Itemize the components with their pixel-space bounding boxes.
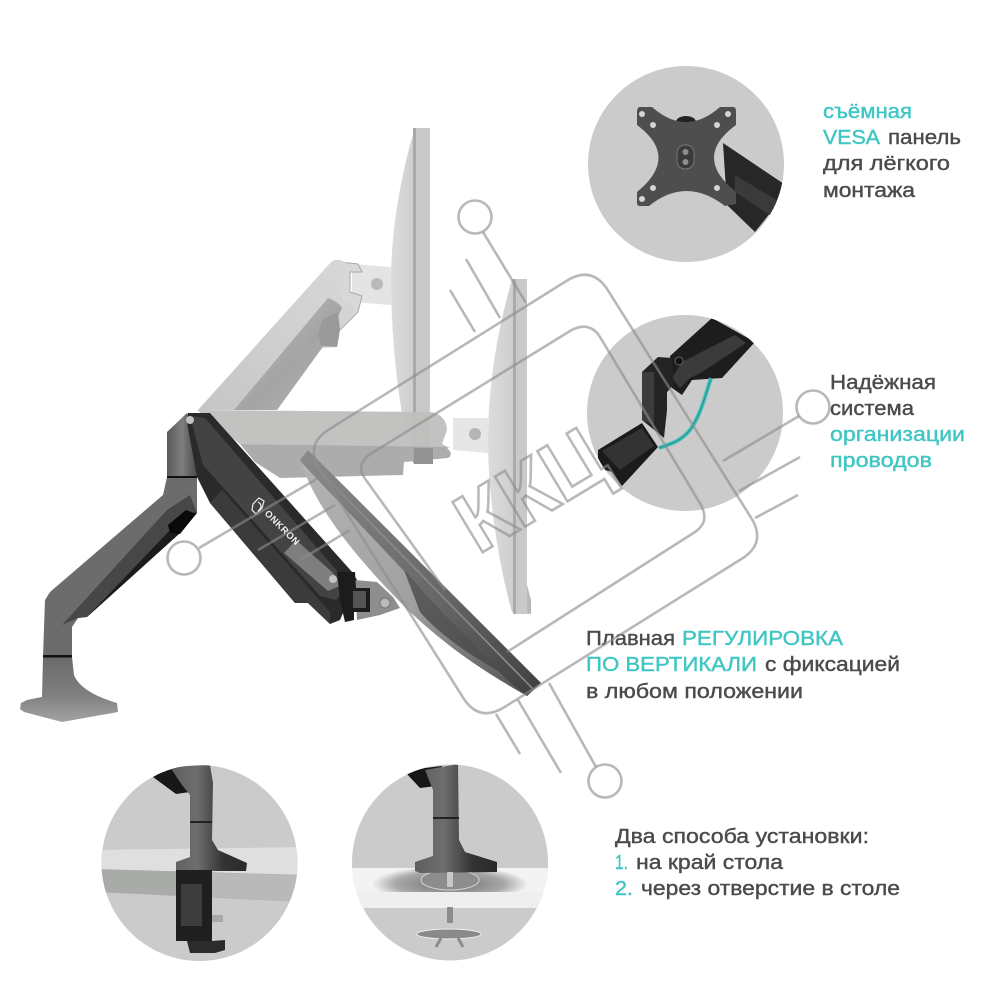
upper arm <box>187 413 357 624</box>
teal cable <box>659 378 711 448</box>
text: VESA caption: монтажа <box>823 180 916 202</box>
collar ring <box>433 817 459 819</box>
arm shoulder <box>153 767 188 794</box>
text: cable caption: организации <box>830 424 965 446</box>
text: VESA caption: панель <box>888 127 961 149</box>
bracket bolt middle <box>469 428 481 440</box>
text: installation caption: на край стола <box>636 852 784 874</box>
watermark text: ККЦ <box>439 408 623 571</box>
lower bolt <box>447 907 453 923</box>
text: cable caption: проводов <box>830 450 932 472</box>
silver arm upper position <box>198 128 430 463</box>
text: adjustment caption <box>586 628 900 703</box>
table hole <box>421 870 479 890</box>
pivot joint <box>675 357 683 365</box>
VESA plate <box>637 107 736 206</box>
upper bolt <box>447 872 453 887</box>
bolt on head <box>380 598 390 608</box>
dark tilted monitor <box>300 450 541 696</box>
text: adjustment caption: в любом положении <box>586 681 803 703</box>
bracket: middle position <box>453 418 488 453</box>
bracket bolt upper <box>371 278 383 290</box>
washer plate <box>417 929 481 939</box>
desk clamp base <box>20 657 118 722</box>
watermark outer frame <box>314 275 757 713</box>
bracket: upper position <box>352 264 391 305</box>
table front edge <box>350 892 550 908</box>
text: VESA caption <box>823 101 961 202</box>
text: adjustment caption: с фиксацией <box>765 654 900 676</box>
desk edge <box>95 869 305 902</box>
text: adjustment caption: Плавная <box>586 628 675 650</box>
vertical column <box>642 357 674 438</box>
upper arm face <box>190 416 345 600</box>
connector: top <box>450 200 526 332</box>
column <box>170 765 247 871</box>
watermark lines <box>168 200 830 798</box>
desk top surface <box>95 847 305 875</box>
text: cable caption: система <box>830 398 915 420</box>
hinge upper <box>340 262 362 330</box>
text: adjustment caption: РЕГУЛИРОВКА <box>682 628 844 650</box>
text: installation caption: через отверстие в столе <box>641 878 900 900</box>
connector: bottom <box>496 683 622 798</box>
connector: left <box>168 477 350 574</box>
column <box>415 764 497 873</box>
arm behind plate <box>723 143 782 232</box>
panel: clamp mount circle <box>95 765 305 961</box>
connector: right <box>723 390 830 518</box>
monitor bezel <box>300 450 541 696</box>
arm: middle position lower face <box>240 444 451 478</box>
black joint <box>337 572 370 622</box>
upper arm section <box>670 318 755 395</box>
gas spring highlight <box>284 540 342 591</box>
brand name: ONKRON <box>262 508 302 548</box>
text: adjustment caption: ПО ВЕРТИКАЛИ <box>586 654 757 676</box>
tilt head <box>355 580 400 620</box>
rivet top <box>186 416 194 424</box>
silver arm middle position <box>197 279 531 614</box>
text: VESA caption: для лёгкого <box>823 153 950 175</box>
text: cable caption: Надёжная <box>830 372 936 394</box>
arm: upper position <box>198 260 354 410</box>
wing nuts <box>436 938 463 947</box>
text: VESA caption: съёмная <box>823 101 912 123</box>
rivet bottom <box>329 575 337 583</box>
mounting holes <box>639 111 731 202</box>
collar ring <box>190 821 212 823</box>
lower arm section <box>598 423 658 486</box>
clamp screw <box>212 915 223 922</box>
dark monitor arm <box>20 413 400 722</box>
panel: VESA plate circle <box>588 66 790 262</box>
text: installation caption: 2. <box>615 878 633 900</box>
arm mid tone <box>62 495 197 625</box>
plate knob <box>676 116 696 122</box>
column ring <box>43 655 72 658</box>
watermark inner frame <box>361 327 704 652</box>
text: VESA caption: VESA <box>823 127 881 149</box>
text: installation caption: Два способа установки: <box>615 826 869 848</box>
arm underside <box>87 512 197 617</box>
center slot <box>677 145 694 169</box>
panel: through-hole mount circle <box>350 764 550 960</box>
panel: cable management circle <box>587 315 783 511</box>
elbow joint <box>167 413 197 477</box>
monitor: middle position <box>488 279 531 614</box>
arm: middle position upper face <box>197 410 450 448</box>
clamp foot <box>187 940 225 953</box>
clamp body <box>176 870 212 941</box>
arm column <box>43 477 197 657</box>
text: installation caption <box>615 826 900 900</box>
arm shoulder <box>406 766 442 788</box>
brand logo icon <box>252 498 264 514</box>
table surface with shadow <box>350 868 550 894</box>
text: cable caption <box>830 372 965 472</box>
text: installation caption: 1. <box>615 852 628 874</box>
underside lighter rim <box>210 490 330 624</box>
monitor: upper position <box>391 128 430 463</box>
arm shadow patch <box>414 448 433 464</box>
